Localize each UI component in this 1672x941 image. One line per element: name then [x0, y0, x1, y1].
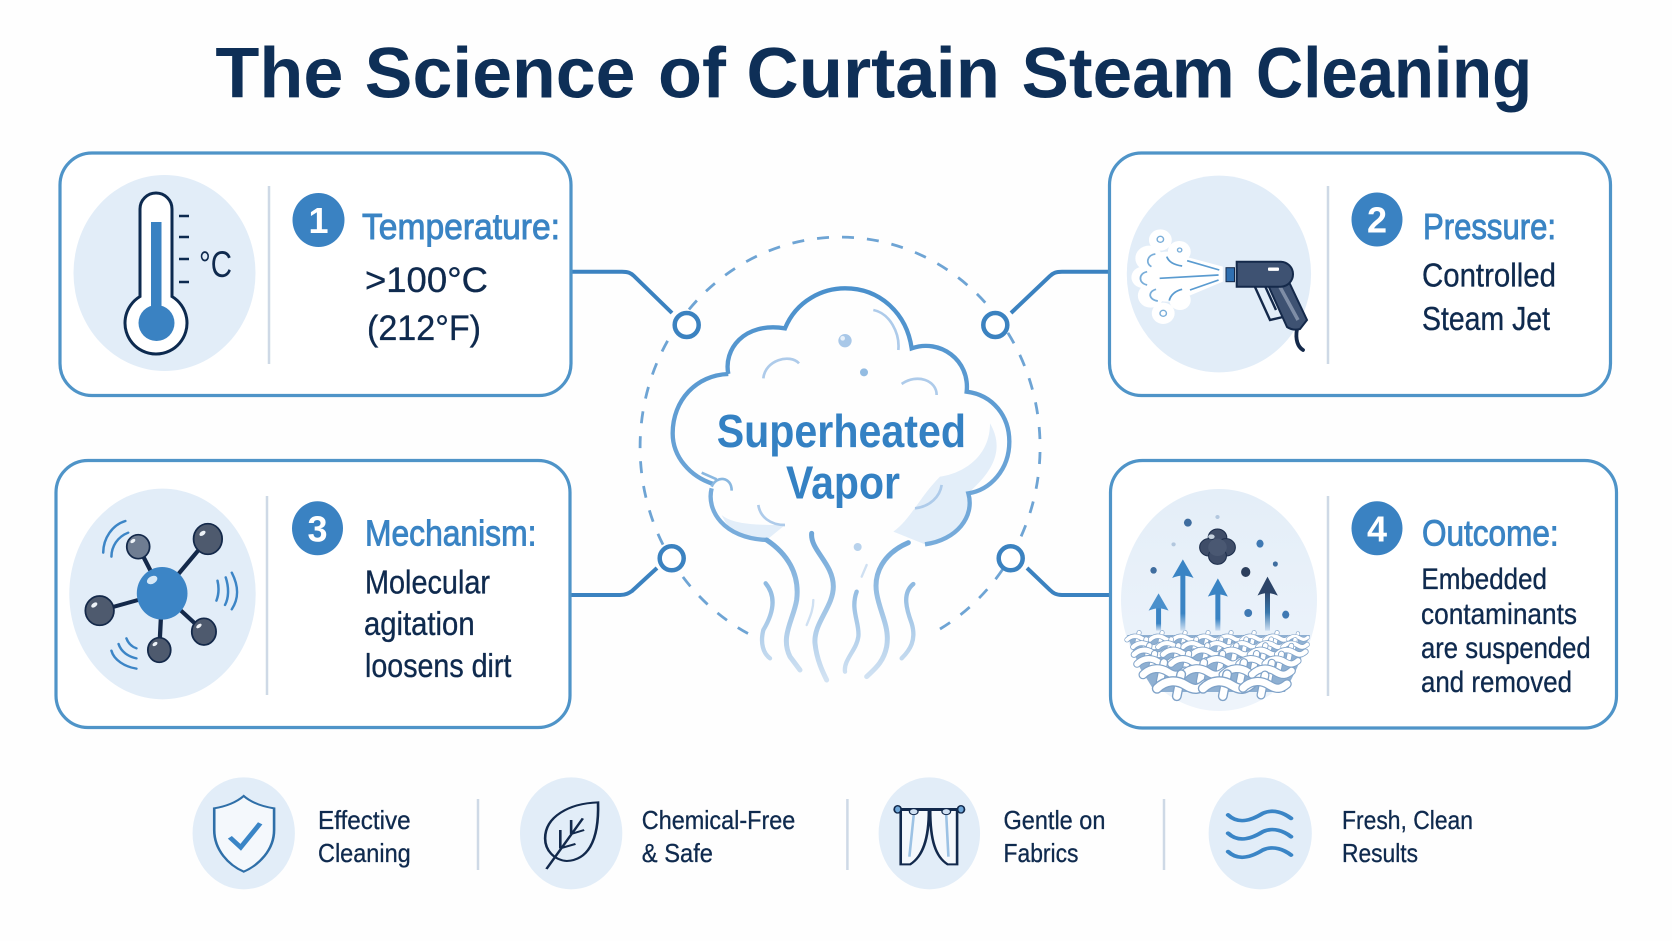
heading: mechanism: Mechanism:	[365, 513, 536, 554]
label	[1342, 805, 1473, 868]
benefit: effective cleaning	[193, 777, 411, 889]
badge 3: 3	[307, 508, 328, 549]
label: Chemical-Free	[642, 805, 795, 835]
center label: Superheated	[717, 405, 966, 457]
label: Results	[1342, 838, 1418, 868]
badge 1	[292, 193, 344, 247]
text: mechanism description: Molecular	[365, 563, 490, 600]
benefit: fresh, clean results	[1209, 777, 1473, 889]
center label	[717, 405, 966, 508]
text: outcome description: Embedded	[1421, 563, 1547, 596]
text: outcome description: and removed	[1421, 666, 1572, 699]
icon: curtain	[879, 777, 980, 889]
dashed orbit ring	[640, 237, 1040, 634]
steam cloud	[673, 288, 1009, 680]
icon: shield with check	[193, 777, 295, 889]
icon: steam gun	[1127, 176, 1311, 372]
text: pressure description	[1422, 256, 1556, 337]
icon: thermometer: °C	[199, 244, 232, 285]
icon: contaminants lifted from fabric	[1121, 489, 1317, 711]
label	[318, 805, 411, 868]
panel: mechanism	[56, 460, 570, 728]
text: temperature value: (212°F)	[367, 309, 481, 348]
label: Effective	[318, 805, 411, 835]
rising arrows and particles	[1149, 515, 1289, 631]
badge 1: 1	[308, 200, 329, 241]
title	[215, 34, 1532, 114]
woven fabric	[1127, 633, 1310, 696]
text: temperature value: >100°C	[365, 261, 488, 300]
text: mechanism description: loosens dirt	[365, 647, 511, 684]
text: pressure description: Steam Jet	[1422, 300, 1550, 337]
heading: outcome: Outcome:	[1422, 513, 1559, 554]
title: The	[215, 34, 343, 114]
connector: outcome to vapor	[1027, 568, 1110, 595]
label: Fabrics	[1004, 838, 1078, 868]
heading: temperature: Temperature:	[362, 206, 560, 247]
badge 2	[1352, 192, 1402, 246]
badge 2: 2	[1367, 200, 1387, 240]
panel: outcome	[1110, 460, 1616, 728]
title: Steam	[1022, 34, 1235, 114]
panel: temperature	[60, 153, 571, 396]
benefit: gentle on fabrics	[879, 777, 1105, 889]
text: outcome description: contaminants	[1421, 598, 1577, 631]
label: Gentle on	[1004, 805, 1105, 835]
heading: pressure: Pressure:	[1423, 206, 1556, 247]
icon: thermometer	[74, 175, 256, 371]
icon: vibrating molecule	[69, 489, 256, 699]
title: Curtain	[746, 34, 1000, 114]
panel: pressure	[1110, 153, 1610, 396]
benefit: chemical-free and safe	[520, 777, 795, 889]
label: & Safe	[642, 838, 713, 868]
central diagram: superheated vapor	[640, 237, 1040, 680]
connector: mechanism to vapor	[570, 568, 657, 595]
icon: air waves	[1209, 777, 1312, 889]
label	[1004, 805, 1105, 868]
label: Fresh, Clean	[1342, 805, 1473, 835]
text: outcome description: are suspended	[1421, 632, 1591, 665]
title: of	[658, 34, 726, 114]
badge 4: 4	[1367, 508, 1387, 549]
text: temperature value	[365, 261, 488, 348]
connector: temperature to vapor	[571, 272, 672, 313]
label	[642, 805, 795, 868]
connector nodes	[660, 313, 1023, 570]
text: pressure description: Controlled	[1422, 256, 1556, 294]
badge 3	[292, 501, 343, 555]
badge 4	[1352, 501, 1402, 555]
text: mechanism description	[364, 563, 511, 684]
connector: pressure to vapor	[1011, 272, 1108, 313]
icon: leaf	[520, 777, 622, 889]
title: Science	[365, 34, 636, 114]
title: Cleaning	[1256, 34, 1532, 114]
label: Cleaning	[318, 838, 411, 868]
center label: Vapor	[786, 456, 900, 508]
text: mechanism description: agitation	[364, 605, 475, 642]
text: outcome description	[1421, 563, 1591, 699]
